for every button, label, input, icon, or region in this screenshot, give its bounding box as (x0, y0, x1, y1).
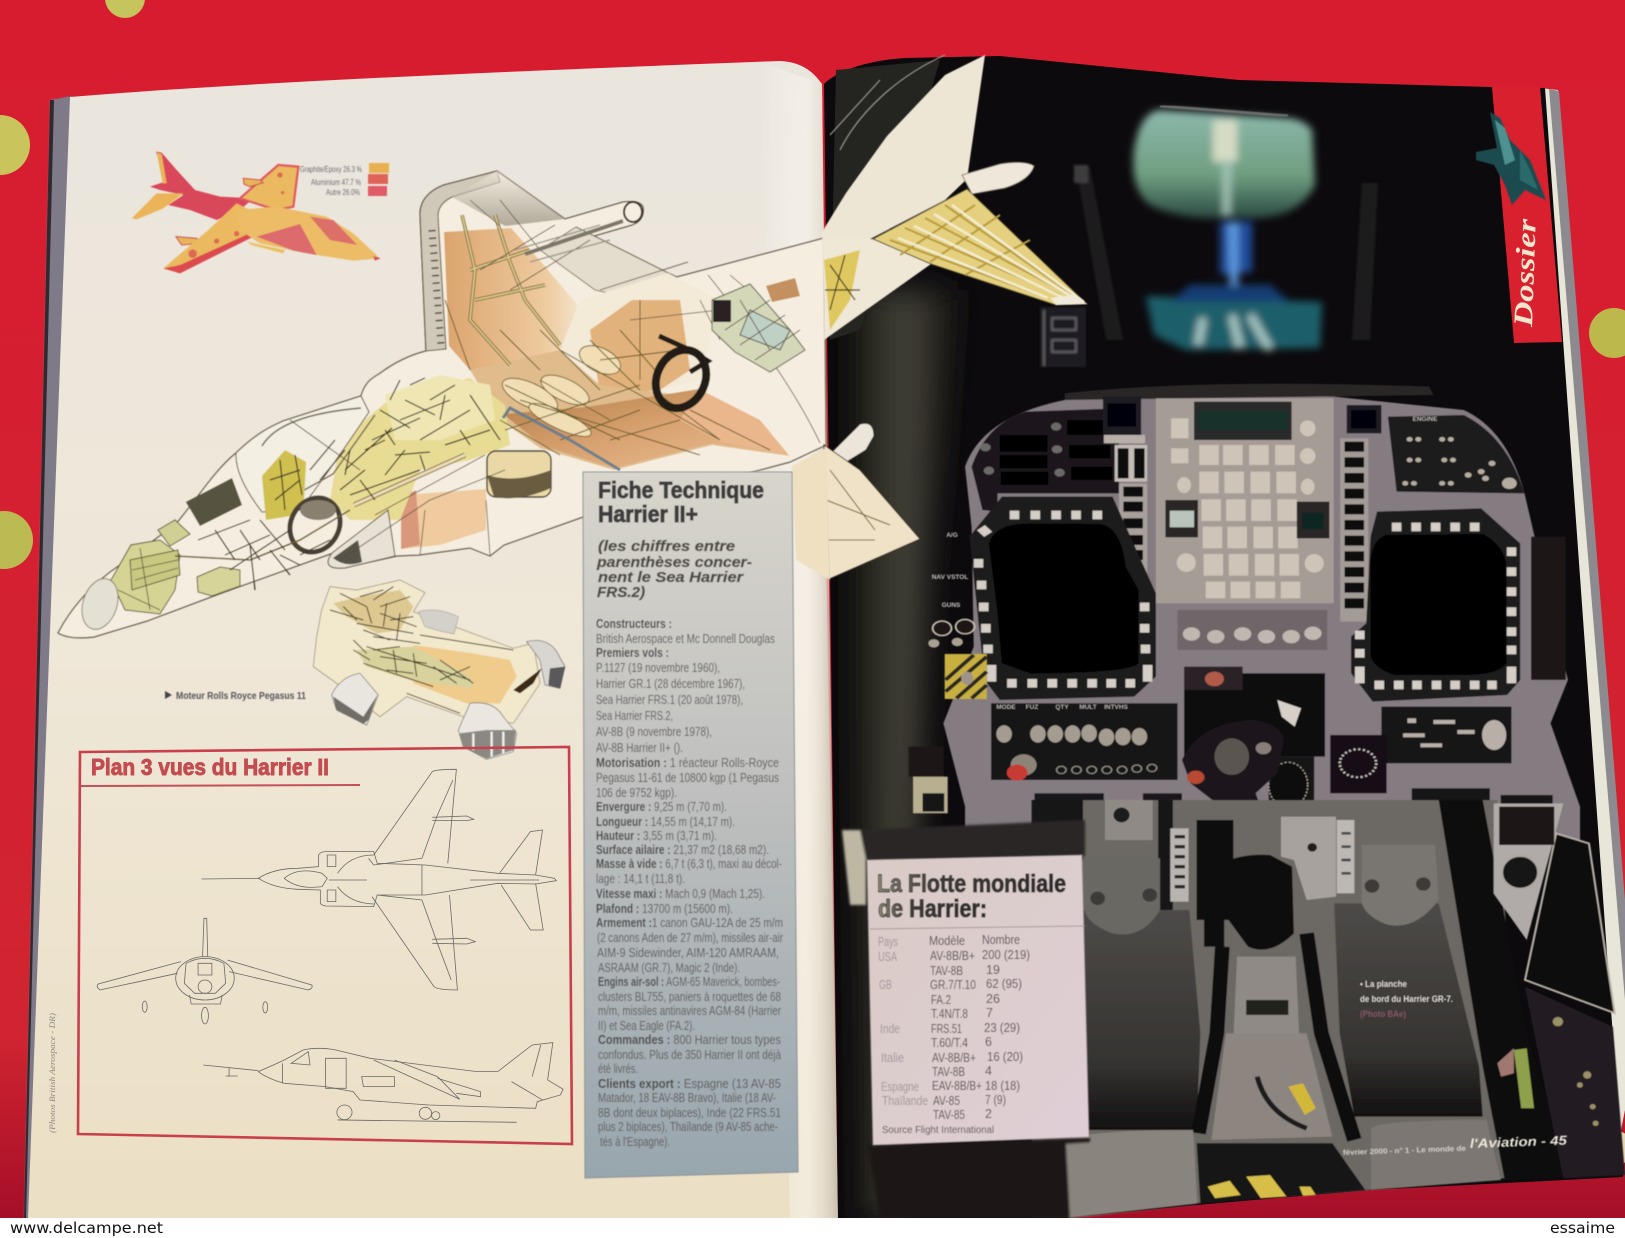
bottom right dark column (1412, 788, 1490, 840)
card specifications text: Clients export : Espagne (13 AV-85 (598, 1077, 781, 1091)
light side columns (1281, 817, 1336, 900)
cockpit instrument labels: NAV VSTOL (932, 574, 968, 581)
oxygen box (909, 747, 948, 813)
long bleed tube (354, 455, 465, 505)
white centre bar (1213, 120, 1237, 162)
blue beam (1220, 222, 1252, 275)
straps (1199, 933, 1354, 1140)
right dark panel (1525, 833, 1615, 1013)
card subheading (596, 538, 752, 601)
card specifications text: AV-8B (9 novembre 1978), (596, 725, 712, 739)
side view drawing (203, 1043, 563, 1122)
Dossier tab (1476, 87, 1562, 343)
avionics bay dark band (186, 478, 242, 526)
main Harrier cutaway illustration (58, 171, 826, 638)
lower wing section beside data card (792, 448, 830, 580)
tail stabiliser (132, 193, 183, 219)
fleet table: EAV-8B/B+ (932, 1079, 982, 1093)
wing fuel tank area tan (444, 228, 590, 385)
engine caption: Moteur Rolls Royce Pegasus 11 (176, 690, 306, 702)
fleet table: TAV-8B (930, 964, 963, 978)
bottom centre column (1143, 793, 1182, 840)
nose wheel (280, 489, 350, 561)
fuel tank (487, 451, 551, 498)
fleet table: 7 (9) (985, 1093, 1006, 1107)
head-up display (1133, 110, 1322, 350)
centre keypad (1156, 398, 1334, 603)
card specifications text: clusters BL755, paniers à roquettes de 68 (598, 990, 781, 1004)
dark wire (1257, 1077, 1307, 1128)
card specifications text: Longueur : 14,55 m (14,17 m). (596, 815, 735, 829)
fin yellow edge (157, 153, 167, 183)
fleet table: AV-85 (933, 1094, 960, 1108)
card subheading: nent le Sea Harrier (598, 569, 744, 586)
card specifications text: ASRAAM (GR.7), Magic 2 (Inde). (598, 961, 740, 975)
wing pod wheel end (624, 202, 642, 222)
left magazine page (24, 61, 838, 1218)
small gauge (1499, 807, 1554, 889)
vertical fin (822, 55, 985, 300)
base floor (1032, 800, 1523, 1217)
card specifications text: Plafond : 13700 m (15600 m). (596, 902, 733, 916)
forward fuselage (237, 207, 380, 261)
fleet table: 7 (986, 1006, 993, 1020)
canopy seam (262, 408, 375, 512)
icon: small jet (1476, 112, 1546, 205)
materials legend: Aluminium 47.7 % (311, 178, 361, 187)
card specifications text: Commandes : 800 Harrier tous types (598, 1033, 781, 1047)
pilot figure (262, 450, 306, 520)
nose equipment boxes (111, 520, 240, 614)
lower left block (1068, 1130, 1197, 1217)
fuselage and wing silhouette (58, 171, 826, 638)
fleet table: 6 (985, 1035, 992, 1049)
fleet table: 62 (95) (986, 977, 1022, 991)
fleet table: FA.2 (931, 993, 951, 1007)
rear equipment boxes (712, 278, 805, 372)
fleet table: Pays (878, 935, 898, 949)
card specifications text: Hauteur : 3,55 m (3,71 m). (596, 829, 717, 843)
cockpit instrument labels: ENGINE (1413, 416, 1438, 423)
left upper square display (1103, 397, 1145, 443)
lower right block (1371, 1120, 1501, 1190)
dark gap by left pedal (1158, 800, 1173, 913)
lower right panel (1381, 707, 1512, 763)
cockpit instrument labels: INTVHS (1104, 704, 1129, 711)
light ladder strips (1170, 820, 1354, 902)
card specifications text: Vitesse maxi : Mach 0,9 (Mach 1,25). (596, 887, 765, 901)
upper green glass (1133, 110, 1315, 218)
wing tubing light core (462, 215, 560, 365)
panel title: Plan 3 vues du Harrier II (91, 754, 329, 780)
card specifications text: 8B dont deux biplaces), Inde (22 FRS.51 (598, 1106, 781, 1120)
card subheading: parenthèses concer- (596, 554, 752, 571)
fleet table (878, 933, 1030, 1136)
page footer: février 2000 - n° 1 - Le monde de (1343, 1144, 1466, 1157)
card specifications text: Surface ailaire : 21,37 m2 (18,68 m2). (596, 843, 769, 857)
hazard switch (945, 654, 987, 699)
panel: plan 3 vues (78, 747, 572, 1144)
fuselage red (150, 152, 253, 220)
dark middle band right (1439, 800, 1571, 1180)
fleet table: Nombre (982, 933, 1020, 947)
left watermark: www.delcampe.net (10, 1219, 163, 1237)
fleet table: Thaïlande (882, 1094, 928, 1108)
yellow tail mechanism (824, 250, 860, 330)
front view drawing (97, 918, 312, 1024)
bottom white strip with watermarks (0, 1218, 1625, 1238)
wing leading edge strip (420, 171, 500, 351)
right multifunction display (1351, 508, 1520, 702)
bottom hazard area (1197, 1143, 1365, 1203)
green strip tag (1514, 1048, 1534, 1108)
photo caption: (Photo BAe) (1360, 1009, 1406, 1019)
pedal bolts (1090, 888, 1157, 905)
yellow hazard stripes (1208, 1175, 1316, 1198)
fleet table: T.60/T.4 (931, 1036, 968, 1050)
cockpit instrument labels: QTY (1055, 704, 1069, 711)
card specifications text: Motorisation : 1 réacteur Rolls-Royce (596, 756, 779, 770)
engine tan core (413, 645, 517, 703)
intake and canopy (257, 224, 317, 255)
panel: fiche technique (583, 472, 798, 1178)
fleet table: Italie (881, 1051, 904, 1065)
intake nacelle (328, 510, 395, 568)
cockpit instrument labels: A/G (946, 532, 958, 539)
instrument panel body (943, 393, 1580, 840)
fleet table: AV-8B/B+ (932, 1051, 976, 1065)
card background (867, 855, 1089, 1145)
right edge switch column (1531, 537, 1566, 680)
wing tubing dark outline (462, 215, 560, 365)
right watermark: essaime (1550, 1219, 1615, 1237)
card heading: Fiche Technique (598, 477, 764, 503)
wing trailing section (540, 227, 668, 300)
left multifunction display (969, 497, 1156, 700)
glass top edge (1160, 106, 1288, 116)
left rudder pedal dark (1083, 910, 1200, 1130)
card specifications text: été livrés. (598, 1062, 638, 1076)
grey area beside data card (842, 820, 1197, 1218)
card specifications text: Pegasus 11-61 de 10800 kgp (1 Pegasus (596, 771, 779, 785)
side strips (1115, 445, 1147, 578)
cockpit instrument labels: MODE (996, 704, 1016, 711)
photo credit: (Photos British Aerospace - DR) (48, 1013, 57, 1133)
fleet table: Espagne (881, 1080, 919, 1094)
fleet table: 18 (18) (985, 1079, 1020, 1093)
section label: Dossier (1508, 218, 1542, 328)
cockpit canopy posts and small dark panel (1040, 165, 1378, 367)
card specifications text: Matador, 18 EAV-8B Bravo), Italie (18 AV- (598, 1091, 776, 1105)
fleet table: TAV-8B (932, 1065, 965, 1079)
fleet table: USA (878, 950, 897, 964)
bottom right switch box (1501, 795, 1553, 840)
upper left switch panel (972, 408, 1119, 512)
fleet table: 23 (29) (984, 1021, 1020, 1035)
card heading: Harrier II+ (598, 501, 698, 527)
fleet table: 4 (985, 1064, 992, 1078)
canopy lines on dark background (830, 55, 945, 150)
fleet table: Modèle (929, 934, 965, 948)
card specifications text: Sea Harrier FRS.2, (596, 709, 673, 723)
card specifications text: Harrier GR.1 (28 décembre 1967), (596, 677, 745, 691)
top compressor clutter (333, 590, 413, 633)
clock (1330, 735, 1387, 793)
cream fuel sausages (498, 340, 625, 443)
glareshield top arc (1065, 384, 1433, 400)
right rudder pedal dark (1334, 903, 1483, 1117)
lower cockpit floor and seats (1032, 800, 1625, 1217)
card specifications text: Envergure : 9,25 m (7,70 m). (596, 800, 727, 814)
cockpit instrument labels: FUZ (1026, 704, 1038, 711)
fuselage rear shell (824, 238, 931, 340)
page footer: l'Aviation - 45 (1470, 1133, 1568, 1151)
top nozzle (418, 610, 458, 634)
engine yellow mass (330, 378, 510, 520)
grey pod boom (525, 221, 623, 254)
central dark recess (1184, 667, 1325, 757)
photo caption (1360, 979, 1453, 1019)
top view drawing (202, 769, 556, 990)
engine panel top right (1388, 415, 1525, 493)
card specifications text: lage : 14,1 t (11,8 t). (596, 872, 685, 886)
card specifications text: II) et Sea Eagle (FA.2). (598, 1019, 695, 1033)
control stick head (1182, 720, 1284, 840)
horizontal stabiliser with yellow ribs (873, 189, 1087, 305)
right strip (1340, 405, 1381, 622)
card heading: La Flotte mondiale (877, 870, 1066, 898)
fleet table: 16 (20) (987, 1050, 1023, 1064)
cockpit canopy (236, 396, 369, 512)
materials legend: Graphite/Epoxy 26.3 % (300, 165, 362, 174)
card heading (598, 477, 764, 527)
card specifications text: tés à l'Espagne). (600, 1135, 670, 1149)
fleet table: AV-8B/B+ (930, 949, 975, 963)
fleet table: 200 (219) (982, 948, 1030, 962)
fleet table: Source Flight International (882, 1125, 994, 1136)
materials legend: Autre 26.0% (326, 188, 360, 197)
root tan box (590, 300, 690, 395)
card specifications text: confondus. Plus de 350 Harrier II ont déjà (598, 1048, 781, 1062)
centre pillar light (1233, 957, 1299, 1040)
centre dark stick base (1222, 855, 1294, 950)
right wall grey (1494, 803, 1563, 940)
yellow tag (1288, 1083, 1316, 1115)
lower teal glass (1146, 296, 1322, 350)
card specifications text: 106 de 9752 kgp). (596, 786, 677, 800)
card specifications text: AV-8B Harrier II+ (). (596, 741, 683, 755)
cockpit instrument labels (932, 416, 1438, 711)
fleet table: Inde (880, 1022, 900, 1036)
tail bumper pod (962, 162, 1034, 194)
Pegasus engine cutaway (313, 580, 565, 759)
page footer (1343, 1133, 1568, 1157)
card specifications text: plus 2 biplaces), Thaïlande (9 AV-85 ache- (598, 1120, 778, 1134)
materials legend (300, 163, 389, 197)
card specifications text: Armement :1 canon GAU-12A de 25 m/m (596, 916, 783, 930)
wing lower (163, 203, 277, 273)
blue-grey pipe (503, 408, 620, 470)
card specifications text (596, 617, 783, 1149)
fleet table: 2 (985, 1107, 992, 1121)
yellow engine clutter (270, 378, 500, 510)
centre speckled floor (1211, 1033, 1332, 1140)
fleet table: T.4N/T.8 (931, 1007, 968, 1021)
radome (76, 574, 124, 634)
top left dark recess (1032, 800, 1083, 860)
outrigger pod (826, 423, 874, 472)
lower nozzle (458, 703, 517, 759)
rear nozzle (527, 640, 565, 688)
front nozzle (332, 673, 378, 725)
wing upper (240, 165, 298, 210)
leading edge ladder (432, 230, 441, 345)
photo caption: • La planche (1360, 979, 1407, 989)
card specifications text: m/m, missiles antinavires AGM-84 (Harrier (598, 1004, 781, 1018)
card background (583, 472, 798, 1178)
panel: flotte mondiale (867, 855, 1089, 1145)
gun switches (928, 619, 975, 648)
fleet table: FRS.51 (931, 1022, 962, 1036)
cockpit instrument labels: MULT (1079, 704, 1097, 711)
instrument panel (909, 384, 1580, 840)
runway streaks (1198, 315, 1270, 350)
fleet table: GB (879, 978, 892, 992)
main landing wheel (647, 336, 715, 416)
fuselage lower tan panel (401, 489, 486, 549)
bottom left vent panel (1034, 793, 1104, 840)
fleet table: GR.7/T.10 (930, 978, 976, 992)
cockpit instrument labels: GUNS (942, 602, 961, 609)
lower right side panel (1525, 987, 1625, 1178)
card subheading: FRS.2) (597, 584, 645, 601)
right pedal top (1362, 845, 1439, 926)
mid body tan (470, 350, 790, 470)
card subheading: (les chiffres entre (598, 538, 735, 555)
lower left toggle panel (991, 703, 1178, 781)
engine line detail (330, 587, 513, 713)
fleet table: TAV-85 (933, 1108, 965, 1122)
forward wiring (175, 510, 350, 560)
fleet table: 19 (986, 963, 1000, 977)
card specifications text: P.1127 (19 novembre 1960), (596, 661, 720, 675)
right magazine page: cockpit photo background (824, 56, 1625, 1218)
card specifications text: British Aerospace et Mc Donnell Douglas (596, 632, 775, 646)
card specifications text: Masse à vide : 6,7 t (6,3 t), maxi au décol- (596, 857, 782, 871)
mechanical line detail (175, 200, 820, 590)
card specifications text: Sea Harrier FRS.1 (20 août 1978), (596, 693, 743, 707)
panel frame (78, 747, 572, 1144)
attitude gauge (1269, 757, 1314, 813)
upper wing shading (452, 171, 565, 226)
card specifications text: AIM-9 Sidewinder, AIM-120 AMRAAM, (597, 946, 779, 960)
card specifications text: Engins air-sol : AGM-65 Maverick, bombes- (598, 975, 780, 989)
lower centre knob panel (1178, 610, 1327, 650)
pods (243, 178, 263, 187)
card heading: de Harrier: (878, 895, 987, 923)
card specifications text: (2 canons Aden de 27 m/m), missiles air-air (597, 931, 783, 945)
left pedal top (1085, 858, 1160, 935)
lower wing tan band (503, 389, 788, 468)
card specifications text: Constructeurs : (596, 617, 672, 631)
card specifications text: Premiers vols : (596, 646, 669, 660)
small composite materials aircraft (132, 152, 381, 273)
photo caption: de bord du Harrier GR-7. (1360, 994, 1453, 1004)
lower wing on right page (824, 445, 920, 579)
fleet table: 26 (986, 992, 1000, 1006)
tail section on right page (822, 55, 1087, 579)
card heading (870, 870, 1085, 929)
